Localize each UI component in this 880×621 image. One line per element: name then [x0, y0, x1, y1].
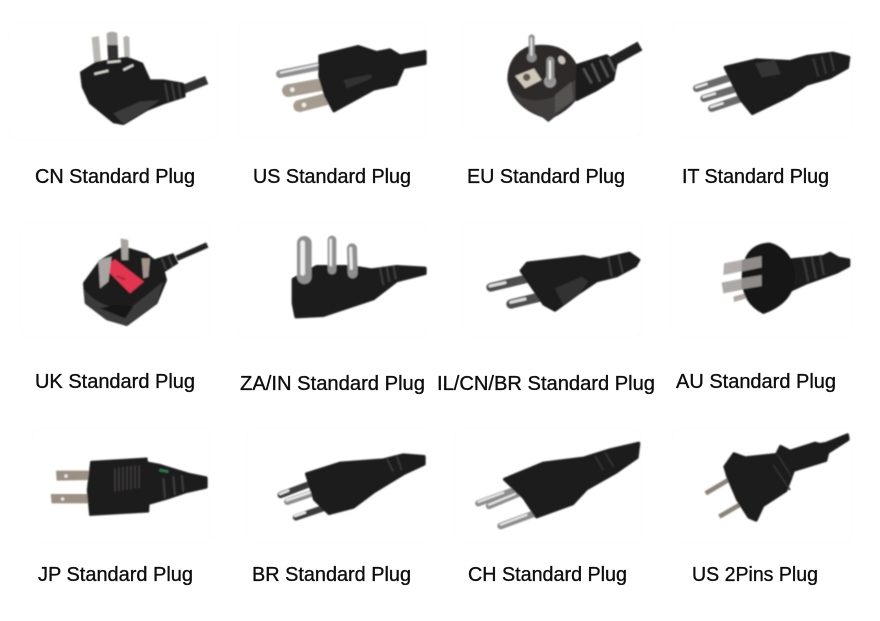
- label: BR: BR Standard Plug: [252, 564, 411, 586]
- label: IL/CN/BR: IL/CN/BR Standard Plug: [437, 373, 655, 395]
- label: ZA/IN: ZA/IN Standard Plug: [240, 373, 425, 395]
- panel: IL/CN/BR standard plug: [437, 222, 655, 395]
- label: CN: CN Standard Plug: [35, 166, 195, 188]
- panel: UK standard plug: [20, 222, 210, 393]
- icon: BR plug: [280, 455, 424, 517]
- label: EU: EU Standard Plug: [467, 166, 625, 188]
- panel: CN standard plug: [8, 22, 218, 188]
- label: IT: IT Standard Plug: [682, 166, 829, 188]
- panel: BR standard plug: [247, 428, 427, 586]
- panel: EU standard plug: [462, 22, 642, 188]
- panel: US 2-pin plug: [672, 428, 852, 586]
- icon: ZA/IN plug: [293, 240, 425, 317]
- icon: AU plug: [722, 243, 849, 314]
- label: US: US Standard Plug: [253, 166, 411, 188]
- icon: EU plug: [508, 37, 640, 121]
- label: AU: AU Standard Plug: [676, 371, 836, 393]
- label: CH: CH Standard Plug: [468, 564, 627, 586]
- panel: AU standard plug: [670, 222, 852, 393]
- panel: US standard plug: [239, 22, 426, 188]
- label: JP: JP Standard Plug: [38, 564, 193, 586]
- icon: JP plug: [51, 458, 206, 515]
- label: US 2Pins: US 2Pins Plug: [692, 564, 818, 586]
- panel: CH standard plug: [455, 428, 641, 586]
- panel: JP standard plug: [32, 428, 210, 586]
- icon: CN plug: [82, 32, 207, 124]
- panel: IT standard plug: [672, 22, 852, 188]
- panel: ZA/IN standard plug: [237, 222, 427, 395]
- label: UK: UK Standard Plug: [35, 371, 195, 393]
- icon: UK plug: [83, 238, 207, 326]
- icon: US 2-pin plug: [706, 435, 848, 520]
- icon: IT plug: [696, 53, 849, 113]
- icon: US plug: [280, 47, 425, 111]
- icon: IL/CN/BR plug: [490, 253, 639, 310]
- icon: CH plug: [478, 443, 639, 526]
